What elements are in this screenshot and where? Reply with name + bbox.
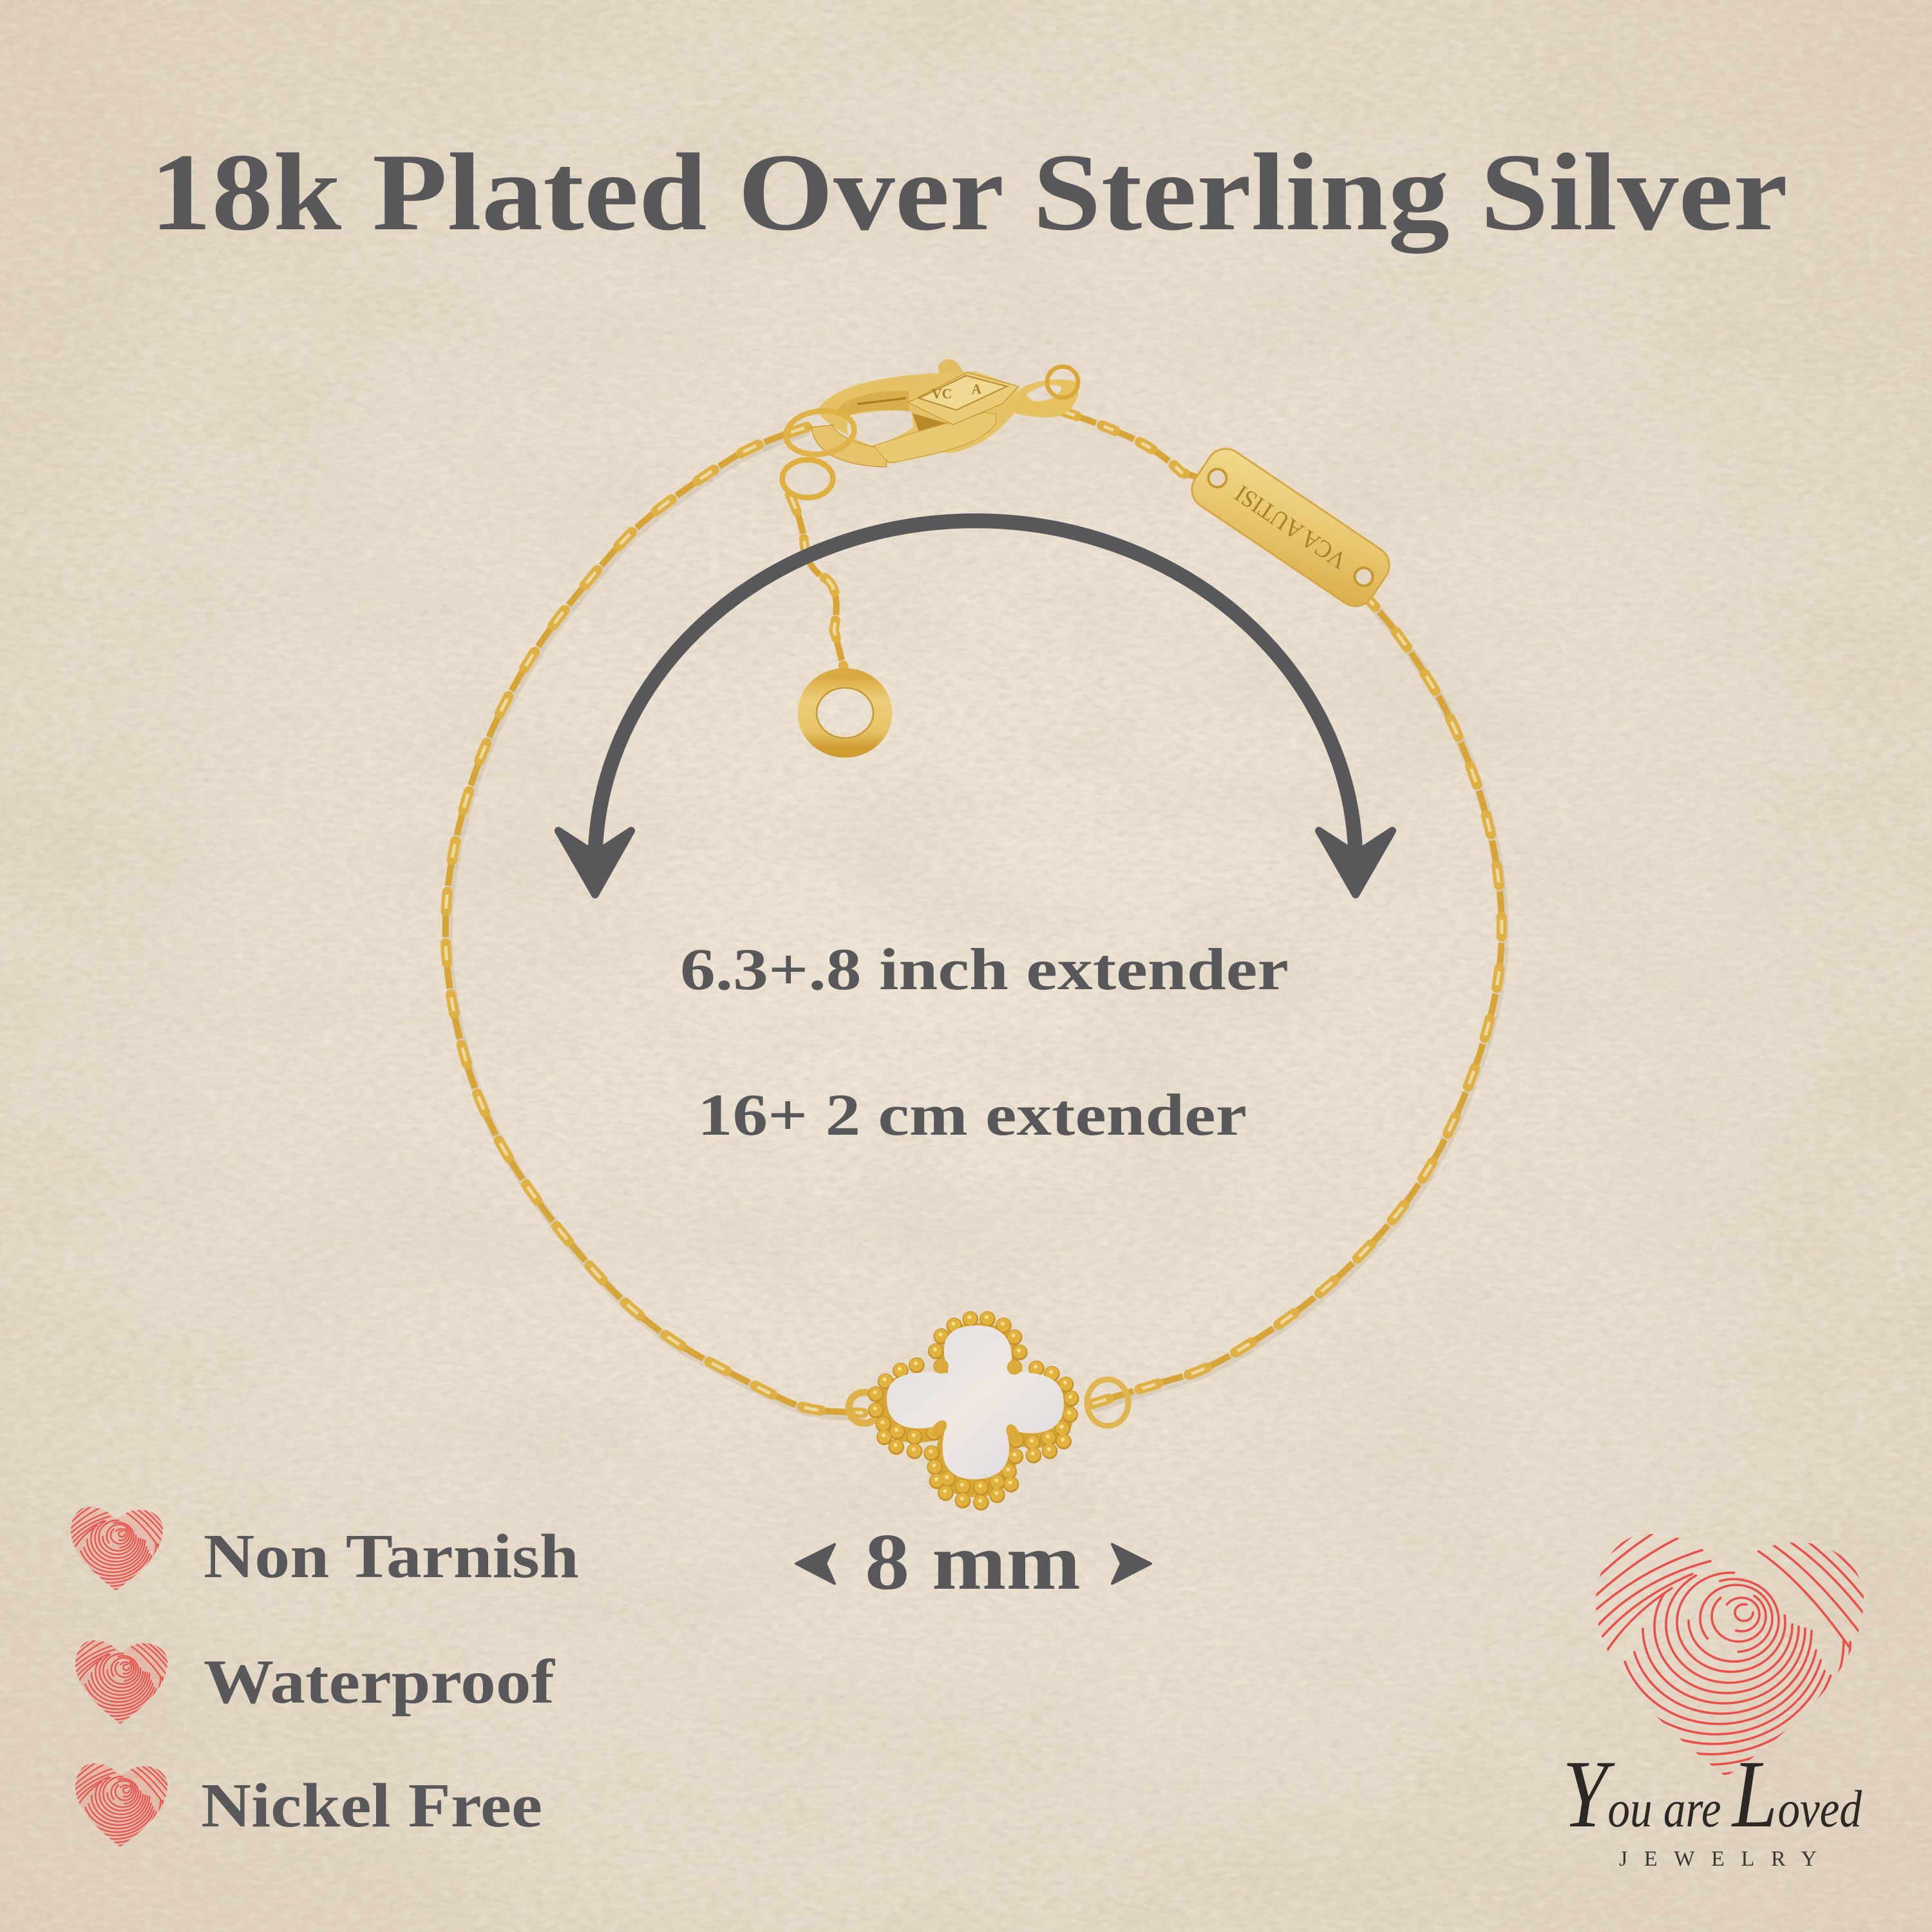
logo: jewelry: JEWELRY (1619, 1847, 1817, 1871)
mother of pearl (887, 1325, 1064, 1479)
beaded border (875, 1317, 1071, 1502)
diamond plate (908, 372, 1019, 424)
extender drop ring (807, 677, 883, 748)
name tag: VCA AUTISI (1230, 480, 1352, 574)
feature: waterproof (64, 1632, 556, 1724)
title: 18k Plated Over Sterling Silver (150, 131, 1788, 254)
left connector (849, 1392, 880, 1423)
feature: non tarnish (59, 1499, 579, 1591)
hook (811, 425, 887, 467)
feature list (59, 1499, 579, 1847)
label: Nickel Free (201, 1771, 542, 1841)
clasp nub (938, 359, 964, 377)
left arrowhead (558, 831, 631, 895)
logo: fingerprint heart (1562, 1510, 1870, 1775)
icon: fingerprint heart (59, 1499, 165, 1591)
extender chain (790, 495, 844, 667)
jump ring left (783, 406, 857, 459)
charm width label (796, 1518, 1151, 1607)
clover charm (849, 1317, 1128, 1502)
right jump ring (1087, 1379, 1128, 1426)
jump ring right (1047, 366, 1078, 397)
bead backing (882, 1328, 1069, 1492)
notch beads (929, 1359, 1023, 1446)
label: Waterproof (204, 1647, 556, 1717)
upper right chain between clasp and tag (1063, 412, 1216, 482)
size in inches: 6.3+.8 inch extender (680, 936, 1289, 1002)
clasp: A (971, 381, 981, 397)
right arrowhead (1319, 831, 1392, 895)
clasp shade (913, 413, 953, 431)
inner slot (837, 391, 909, 415)
bracelet chain (446, 412, 1504, 1416)
icon: fingerprint heart (64, 1632, 169, 1724)
jump ring lower (782, 460, 833, 498)
size in centimetres: 16+ 2 cm extender (697, 1082, 1247, 1148)
label: Non Tarnish (204, 1522, 579, 1591)
right chevron (1112, 1544, 1151, 1584)
lower arm (874, 412, 996, 462)
right eye (1003, 379, 1079, 417)
logo: script wordmark: You are Loved (1562, 1741, 1862, 1848)
chain shadow (448, 430, 1504, 1416)
measurement: 8 mm (865, 1518, 1081, 1607)
diamond engraving: VC (932, 385, 952, 401)
arc arrow: length (558, 521, 1392, 895)
brand logo (1562, 1510, 1870, 1871)
name tag (1184, 441, 1397, 614)
clasp (782, 359, 1079, 498)
left chain links (446, 427, 863, 1413)
feature: nickel free (64, 1755, 542, 1847)
clasp body (817, 372, 1019, 464)
right chain links (1090, 599, 1502, 1405)
icon: fingerprint heart (64, 1755, 169, 1847)
left chevron (796, 1544, 835, 1584)
